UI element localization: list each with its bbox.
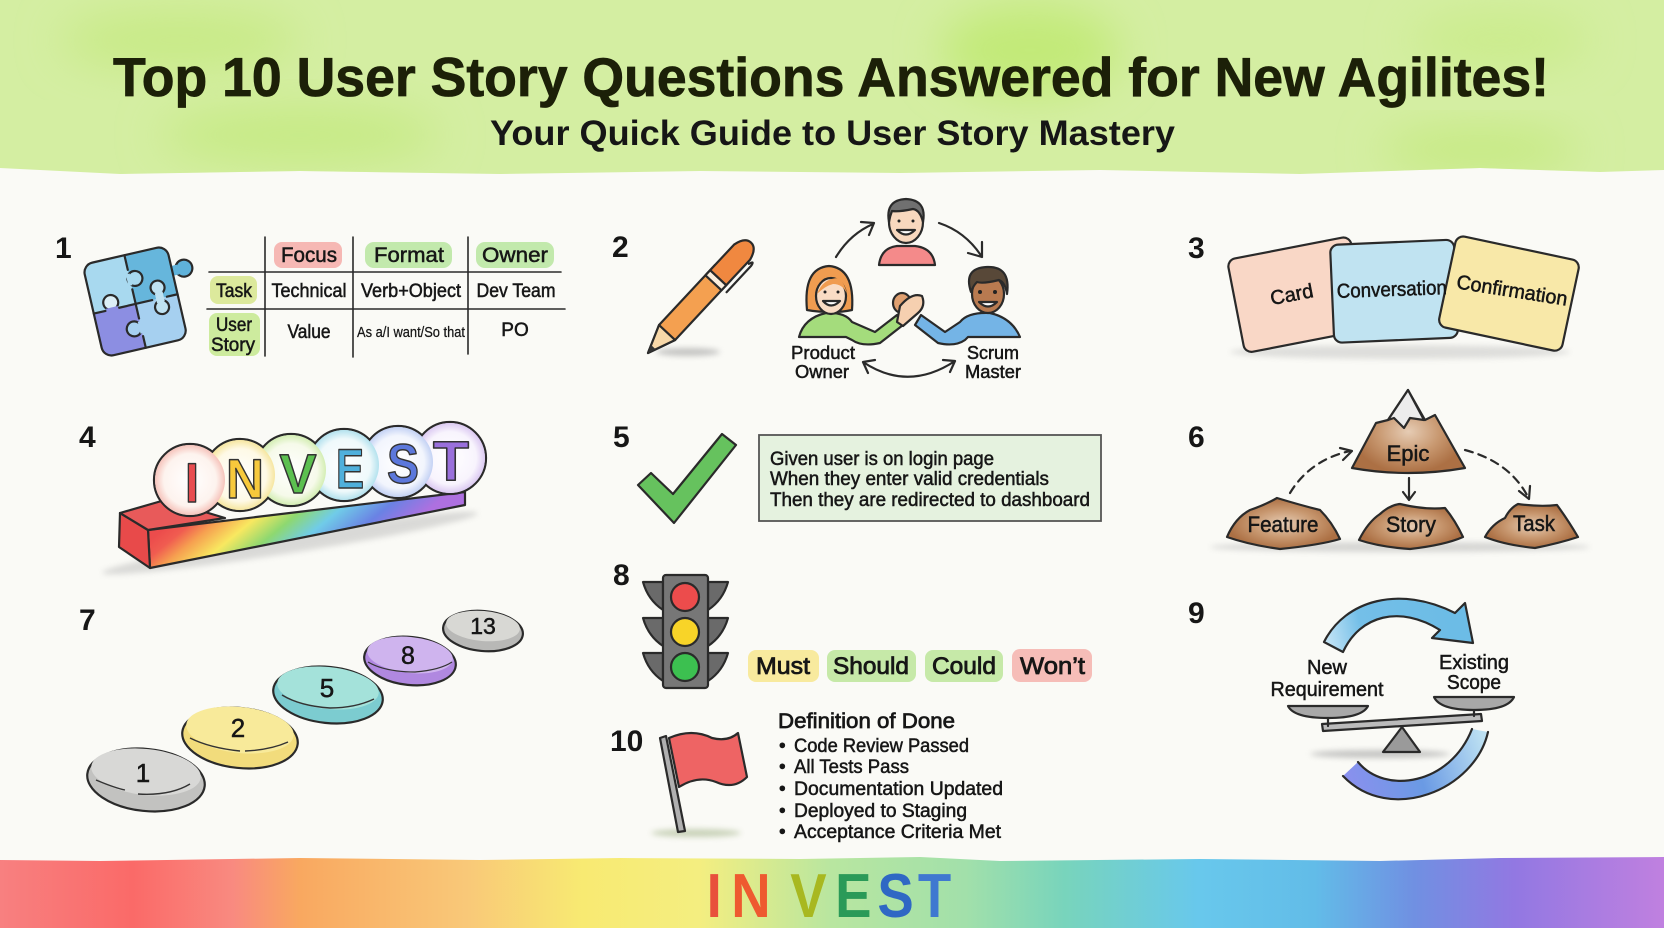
pills <box>209 242 554 356</box>
text: definition of done list: All Tests Pass <box>794 757 909 778</box>
stone: 1: 1 <box>136 758 150 788</box>
table text: Dev Team <box>476 281 556 302</box>
number 8: 8 <box>613 559 630 592</box>
illustration: INVEST balls: I <box>185 451 199 514</box>
labels: new requirement, existing scope: Existing <box>1439 652 1509 674</box>
table text: Technical <box>272 281 346 302</box>
panel 7: story point stones <box>79 604 525 817</box>
number 2: 2 <box>612 231 629 264</box>
illustration: INVEST balls: V <box>280 442 316 505</box>
number 5: 5 <box>613 421 630 454</box>
panel 9: change and scope balance <box>1188 597 1514 799</box>
arrow: top curved <box>1324 599 1473 652</box>
text: definition of done list <box>778 710 1003 843</box>
illustration: INVEST balls: T <box>433 429 469 492</box>
arrows: hierarchy <box>1290 448 1530 500</box>
panel 3: three Cs cards <box>1188 232 1580 359</box>
rock: feature <box>1227 498 1340 549</box>
title: Top 10 User Story Questions Answered for New Agilites! <box>113 46 1549 108</box>
table text <box>211 244 556 356</box>
text: definition of done list: Documentation Updated <box>794 779 1003 800</box>
pills: must should could wont: Won’t <box>1020 653 1085 680</box>
rock: story <box>1359 504 1463 549</box>
text: definition of done list: Definition of Done <box>778 710 955 733</box>
stone: 2 <box>179 701 301 774</box>
label: Product Owner: Owner <box>795 362 849 382</box>
stone: 13: 13 <box>470 613 496 639</box>
panel 8: MoSCoW prioritisation <box>613 559 1092 688</box>
card labels: Conversation <box>1336 277 1447 303</box>
pills: must should could wont <box>748 649 1092 682</box>
label: Scrum Master: Master <box>965 362 1021 382</box>
callout: given when then <box>759 435 1101 521</box>
pills: must should could wont: Could <box>932 653 996 680</box>
callout: given when then: Then they are redirected to dashboard <box>770 490 1090 511</box>
pills: must should could wont: Must <box>756 653 810 680</box>
table text: Focus <box>281 244 337 267</box>
stone: 5: 5 <box>320 673 334 703</box>
icon: puzzle <box>83 246 194 357</box>
stone: 5 <box>270 661 386 729</box>
number 1: 1 <box>55 232 72 265</box>
illustration: INVEST balls: N <box>226 447 264 510</box>
arrow: bottom curved <box>1343 729 1488 799</box>
label: Scrum Master: Scrum <box>967 343 1019 363</box>
icon: flag <box>651 733 747 837</box>
text: definition of done list: • <box>779 822 786 843</box>
table text: PO <box>501 320 529 341</box>
labels: new requirement, existing scope: Scope <box>1447 672 1501 694</box>
card: Card <box>1227 236 1368 353</box>
callout: given when then: When they enter valid credentials <box>770 469 1049 490</box>
icon: epic mountain: Epic <box>1387 441 1429 466</box>
table text: Owner <box>482 244 548 267</box>
number 10: 10 <box>610 725 643 758</box>
number 3: 3 <box>1188 232 1205 265</box>
table text: Format <box>374 244 444 267</box>
number 6: 6 <box>1188 421 1205 454</box>
number 9: 9 <box>1188 597 1205 630</box>
rock: task: Task <box>1513 511 1556 536</box>
card labels: Card <box>1268 280 1315 310</box>
stone: 13 <box>441 608 525 654</box>
table text: User <box>216 315 253 336</box>
illustration: INVEST balls: S <box>387 432 419 495</box>
label: Product Owner: Product <box>791 343 855 363</box>
footer rainbow band <box>0 857 1664 928</box>
rock: feature: Feature <box>1248 512 1318 537</box>
stone: 1 <box>84 743 208 817</box>
icon: epic mountain <box>1352 390 1465 473</box>
illustration: INVEST balls <box>154 422 486 516</box>
text: definition of done list: Code Review Passed <box>794 736 969 757</box>
number 4: 4 <box>79 421 96 454</box>
panel 2: pen and team roles <box>612 199 1021 382</box>
labels: new requirement, existing scope: Requirement <box>1270 679 1384 701</box>
panel 6: epic feature story task <box>1188 390 1590 552</box>
labels: new requirement, existing scope: New <box>1307 657 1348 679</box>
rock: task <box>1485 504 1578 548</box>
text: definition of done list: • <box>779 757 786 778</box>
comparison table <box>207 237 565 357</box>
illustration: scrum master <box>915 267 1021 382</box>
icon: balance scale <box>1288 697 1514 758</box>
header band <box>0 0 1664 174</box>
icon: handshake <box>893 293 923 326</box>
card: Confirmation <box>1438 235 1580 352</box>
stone: 8 <box>362 632 458 690</box>
panel 1: task vs user story <box>55 232 565 357</box>
rock: story: Story <box>1386 512 1436 537</box>
icon: check mark <box>638 434 736 523</box>
icon: pen <box>640 235 763 364</box>
subtitle: Your Quick Guide to User Story Mastery <box>490 114 1176 153</box>
panel 10: definition of done <box>610 710 1003 843</box>
panel 5: acceptance criteria <box>613 421 1101 523</box>
text: definition of done list: • <box>779 736 786 757</box>
labels: new requirement, existing scope <box>1270 652 1509 701</box>
text: definition of done list: • <box>779 779 786 800</box>
panel 4: INVEST blocks <box>79 421 486 583</box>
table text: Story <box>211 335 255 356</box>
text: definition of done list: Acceptance Criteria Met <box>794 822 1002 843</box>
stone: 8: 8 <box>401 642 415 670</box>
table text: Value <box>288 322 330 343</box>
illustration: top team member <box>879 199 935 265</box>
callout: given when then: Given user is on login page <box>770 449 994 470</box>
icon: traffic light <box>643 575 728 688</box>
table text: Verb+Object <box>361 281 462 302</box>
illustration: rainbow bar <box>101 492 479 583</box>
label: Scrum Master <box>965 343 1021 382</box>
card labels <box>1268 271 1569 311</box>
text: definition of done list: Deployed to Staging <box>794 801 967 822</box>
illustration: INVEST balls: E <box>336 437 364 500</box>
table text: Task <box>216 281 252 302</box>
number 7: 7 <box>79 604 96 637</box>
pills: must should could wont: Should <box>833 653 909 680</box>
stone: 2: 2 <box>231 713 245 743</box>
text: definition of done list: • <box>779 801 786 822</box>
table text: As a/I want/So that <box>357 324 466 341</box>
label: Product Owner <box>791 343 855 382</box>
arrows: collaboration cycle <box>836 222 982 377</box>
card: Conversation <box>1330 240 1458 343</box>
card labels: Confirmation <box>1455 271 1569 311</box>
illustration: product owner <box>791 266 903 382</box>
